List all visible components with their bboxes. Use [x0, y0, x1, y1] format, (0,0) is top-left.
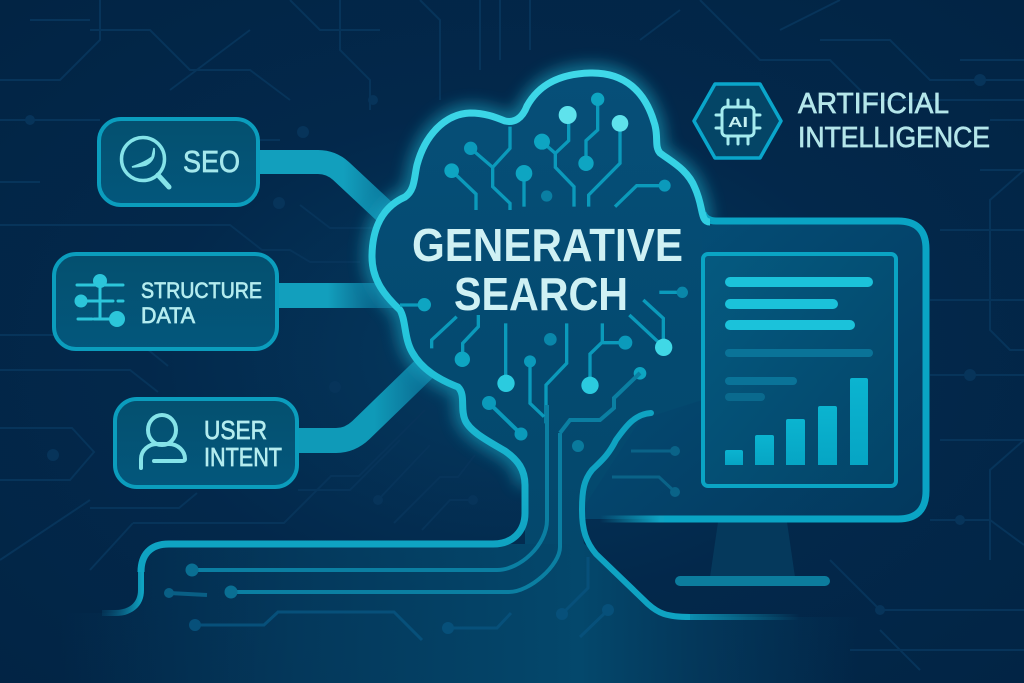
icon: AI chip [716, 100, 760, 144]
panel: SEO [99, 119, 258, 205]
structure data label: STRUCTURE [141, 278, 262, 303]
tree right limb [582, 413, 690, 617]
tree crown and trunk fill [372, 73, 712, 544]
document frame [703, 254, 896, 486]
circuit traces in brain [400, 93, 688, 423]
connector: structure data to cloud [279, 283, 410, 308]
monitor lower edge [600, 516, 664, 522]
panel: artificial intelligence badge [694, 84, 990, 158]
panel: structure data [54, 254, 277, 349]
panel: user intent [115, 399, 297, 487]
icon: structure tree [74, 274, 125, 327]
user intent box [115, 399, 297, 487]
tree outline [141, 73, 710, 572]
artificial intelligence label: ARTIFICIAL [798, 88, 949, 120]
structure data label [141, 278, 262, 328]
hexagon [694, 84, 781, 158]
bar chart [725, 378, 868, 465]
connector: SEO to cloud [259, 162, 400, 226]
SEO label: SEO [183, 144, 240, 179]
SEO box [99, 119, 258, 205]
connector: user intent to cloud [298, 368, 425, 440]
structure data box [54, 254, 277, 349]
document panel [703, 254, 896, 486]
monitor [580, 213, 926, 586]
structure data label: DATA [141, 303, 195, 328]
tree limb tail [690, 614, 800, 620]
title: generative search: SEARCH [454, 268, 628, 320]
icon: user [141, 415, 185, 468]
user intent label: USER [204, 415, 267, 445]
muted text lines [725, 349, 873, 401]
faint traces on screen area [612, 446, 680, 497]
user intent label [204, 415, 282, 472]
trunk and lower traces [164, 373, 640, 640]
artificial intelligence label: INTELLIGENCE [798, 122, 990, 154]
monitor base [675, 576, 830, 586]
title: generative search: GENERATIVE [412, 219, 683, 271]
title: generative search [412, 219, 683, 320]
lower traces [400, 287, 688, 423]
upper traces [444, 93, 671, 210]
monitor frame [660, 213, 926, 519]
cloud glow [372, 73, 710, 485]
icon: AI chip: AI [728, 114, 748, 131]
headline text lines [725, 277, 873, 330]
icon: magnifying glass [122, 138, 169, 187]
lower glow below main trace [60, 543, 860, 683]
artificial intelligence label [798, 88, 990, 154]
tree outline tail [102, 572, 141, 613]
monitor screen [580, 222, 926, 519]
user intent label: INTENT [204, 442, 282, 472]
monitor stand [710, 522, 795, 577]
